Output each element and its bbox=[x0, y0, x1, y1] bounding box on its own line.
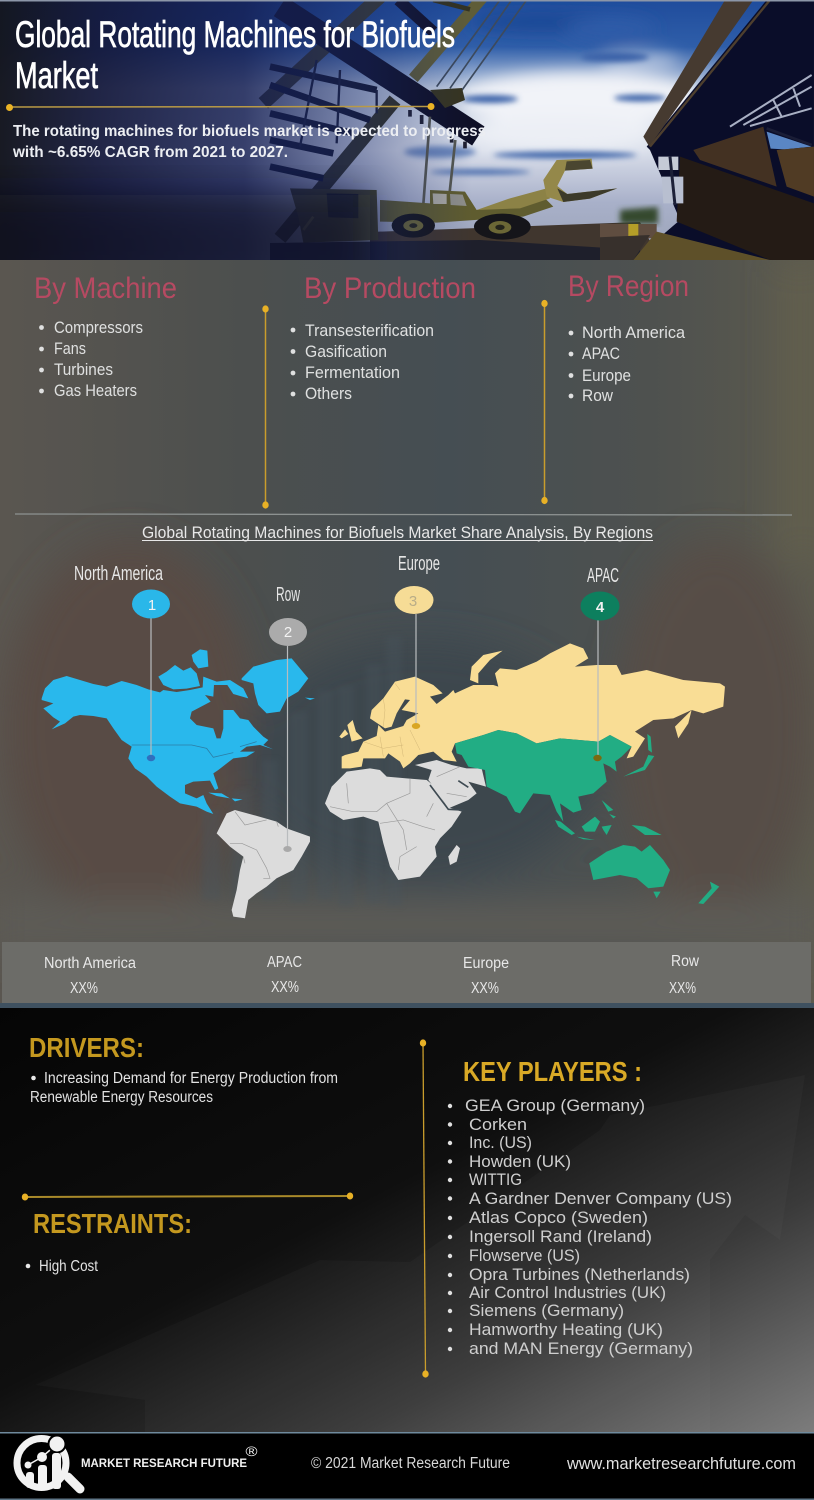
list: machines: Compressors bbox=[54, 319, 143, 337]
heading: by production: By Production bbox=[304, 272, 476, 305]
list: key players: Opra Turbines (Netherlands) bbox=[469, 1265, 690, 1284]
brand name: MARKET RESEARCH FUTURE bbox=[81, 1456, 247, 1470]
divider: machine and production bbox=[262, 305, 269, 509]
pin 2: row: Row bbox=[276, 584, 300, 606]
divider: vertical gold line bbox=[420, 1039, 429, 1378]
list: machines: Fans bbox=[54, 340, 86, 358]
heading: by region: By Region bbox=[568, 270, 689, 303]
list: regions bbox=[569, 324, 686, 405]
list: key players: Hamworthy Heating (UK) bbox=[469, 1320, 663, 1339]
list: key players: Flowserve (US) bbox=[469, 1246, 580, 1265]
list: key players: A Gardner Denver Company (US) bbox=[469, 1189, 732, 1208]
pin 2: row bbox=[269, 584, 307, 852]
list: regions: North America bbox=[582, 324, 686, 342]
restraints: High Cost bbox=[39, 1258, 99, 1275]
list: production bbox=[291, 322, 434, 403]
title bbox=[15, 14, 455, 96]
list: key players: and MAN Energy (Germany) bbox=[469, 1339, 693, 1358]
pin 4: apac: APAC bbox=[587, 565, 619, 587]
restraints: RESTRAINTS: bbox=[33, 1208, 192, 1239]
list: machines bbox=[39, 319, 143, 400]
pin 2: row: 2 bbox=[284, 624, 292, 641]
hero photo: machinery yard bbox=[0, 0, 814, 260]
map: africa and middle east bbox=[325, 760, 486, 880]
heading: by machine: By Machine bbox=[34, 272, 177, 305]
list: key players: Inc. (US) bbox=[469, 1133, 532, 1152]
world map bbox=[42, 643, 725, 918]
crane boom head bbox=[430, 88, 465, 108]
right building bbox=[600, 0, 814, 260]
dump truck bbox=[290, 188, 378, 243]
list: key players bbox=[448, 1096, 732, 1358]
pin 3: europe: 3 bbox=[409, 593, 417, 610]
drivers bbox=[29, 1032, 338, 1106]
panel: footer bbox=[0, 1432, 814, 1500]
pin 4: apac: 4 bbox=[596, 599, 605, 616]
title: Global Rotating Machines for Biofuels bbox=[15, 14, 455, 55]
panel: by production bbox=[291, 272, 476, 403]
list: key players: Ingersoll Rand (Ireland) bbox=[469, 1227, 652, 1246]
panel: market segments and map background bbox=[0, 260, 814, 1005]
share: north america: XX% bbox=[70, 980, 98, 997]
share: europe bbox=[463, 955, 509, 997]
list: machines: Gas Heaters bbox=[54, 382, 137, 400]
share: apac: XX% bbox=[271, 979, 299, 996]
map: asia pacific bbox=[455, 730, 719, 904]
pin 1: north america: 1 bbox=[148, 597, 156, 614]
panel: regional share strip bbox=[0, 942, 814, 1008]
share: apac: APAC bbox=[267, 954, 302, 971]
list: key players: Atlas Copco (Sweden) bbox=[469, 1208, 648, 1227]
list: regions: Row bbox=[582, 387, 613, 405]
share: north america: North America bbox=[44, 955, 136, 972]
list: regions: APAC bbox=[582, 345, 620, 363]
ground bbox=[370, 222, 650, 252]
drivers: Renewable Energy Resources bbox=[30, 1089, 213, 1106]
map: south america bbox=[217, 810, 310, 918]
pin 3: europe: Europe bbox=[398, 553, 440, 575]
list: production: Others bbox=[305, 385, 352, 403]
pin 1: north america: North America bbox=[74, 563, 164, 585]
share: europe: Europe bbox=[463, 955, 509, 972]
list: production: Gasification bbox=[305, 343, 387, 361]
drivers: Increasing Demand for Energy Production from bbox=[44, 1070, 338, 1087]
subtitle: with ~6.65% CAGR from 2021 to 2027. bbox=[12, 144, 288, 161]
panel: hero header bbox=[0, 0, 814, 260]
list: key players: Siemens (Germany) bbox=[469, 1301, 624, 1320]
key players bbox=[448, 1056, 732, 1358]
list: machines: Turbines bbox=[54, 361, 113, 379]
copyright: © 2021 Market Research Future bbox=[311, 1455, 510, 1472]
pin 3: europe bbox=[394, 553, 440, 729]
panel: by region bbox=[568, 270, 689, 405]
list: production: Transesterification bbox=[305, 322, 434, 340]
subtitle: The rotating machines for biofuels market is expected to progress bbox=[13, 123, 486, 140]
list: key players: Howden (UK) bbox=[469, 1152, 571, 1171]
drivers: DRIVERS: bbox=[29, 1032, 144, 1063]
heading: key players: KEY PLAYERS : bbox=[463, 1056, 642, 1087]
wheel loader bbox=[380, 159, 617, 240]
share: north america bbox=[44, 955, 136, 997]
list: regions: Europe bbox=[582, 367, 631, 385]
subtitle bbox=[12, 123, 486, 161]
crane structure bbox=[263, 0, 527, 238]
share: europe: XX% bbox=[471, 980, 499, 997]
website: www.marketresearchfuture.com bbox=[566, 1454, 796, 1473]
map: europe and russia bbox=[339, 643, 725, 768]
share: row: XX% bbox=[669, 980, 696, 997]
divider: drivers and restraints bbox=[22, 1192, 353, 1200]
map: north america bbox=[42, 649, 315, 814]
panel: drivers, restraints and key players bbox=[0, 1008, 814, 1432]
pin 4: apac bbox=[580, 565, 620, 761]
share: row bbox=[669, 953, 700, 997]
share: row: Row bbox=[671, 953, 700, 970]
list: key players: WITTIG bbox=[469, 1170, 522, 1189]
brand name bbox=[81, 1443, 258, 1470]
pin 1: north america bbox=[74, 563, 170, 761]
list: key players: Corken bbox=[469, 1115, 527, 1134]
list: key players: Air Control Industries (UK) bbox=[469, 1283, 666, 1302]
divider: production and region bbox=[541, 300, 548, 504]
list: key players: GEA Group (Germany) bbox=[465, 1096, 645, 1115]
share: apac bbox=[267, 954, 302, 996]
list: production: Fermentation bbox=[305, 364, 400, 382]
title divider with gold dots bbox=[6, 103, 434, 111]
panel: by machine bbox=[34, 272, 177, 400]
title: Market bbox=[15, 55, 99, 96]
brand name: ® bbox=[246, 1443, 258, 1459]
restraints bbox=[26, 1208, 192, 1275]
icon: market research future logo bbox=[17, 1434, 80, 1490]
heading: market share analysis: Global Rotating Machines for Biofuels Market Share Analysis, By Regions bbox=[142, 523, 653, 542]
